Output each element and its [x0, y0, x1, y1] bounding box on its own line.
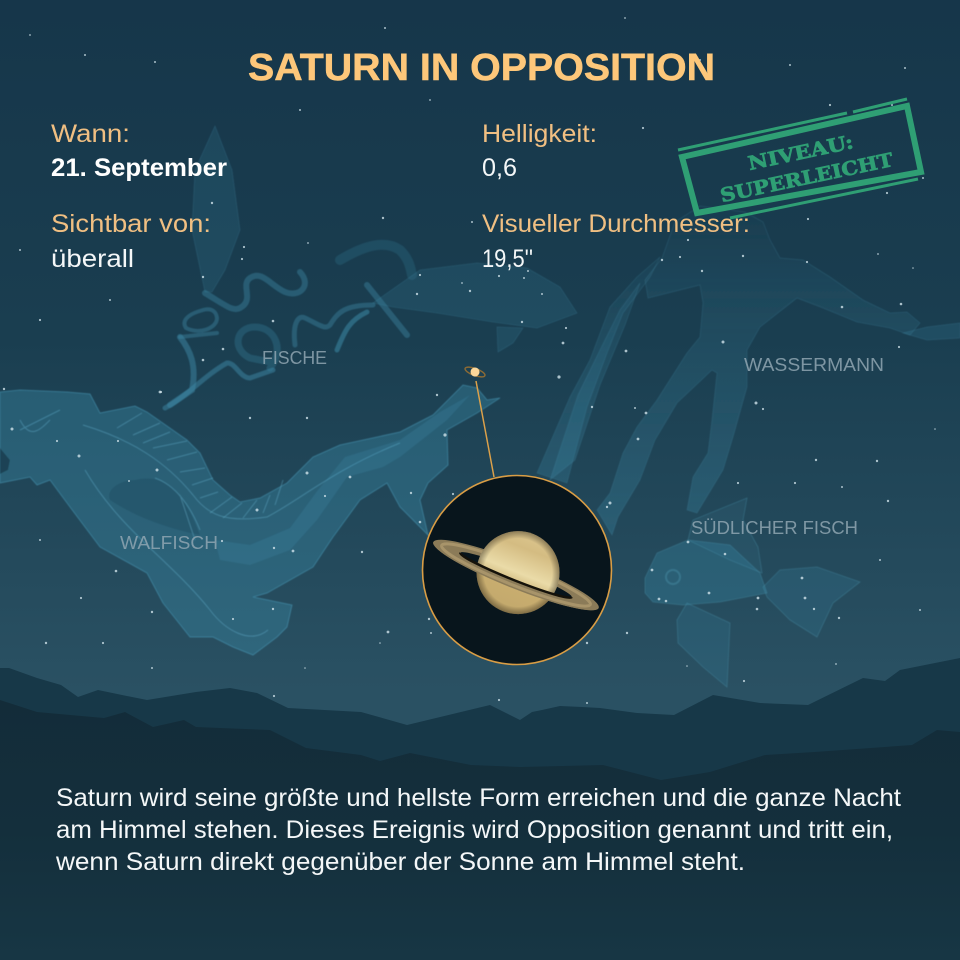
stamp: difficulty level: NIVEAU: — [746, 131, 855, 175]
info block: date: 21. September — [51, 154, 227, 182]
info block: brightness — [482, 120, 597, 182]
stars — [3, 17, 936, 704]
mountains: back ridge — [0, 658, 960, 800]
whale mouth gap — [0, 448, 10, 474]
description paragraph: wenn Saturn direkt gegenüber der Sonne am Himmel steht. — [55, 848, 745, 876]
icon: small Saturn marker — [464, 364, 486, 380]
info block: brightness: 0,6 — [482, 154, 517, 182]
mountains: front ridge — [0, 700, 960, 960]
constellation: Wassermann — [537, 206, 960, 535]
constellation: Walfisch — [0, 385, 500, 655]
stamp: difficulty level — [678, 99, 921, 218]
description paragraph: am Himmel stehen. Dieses Ereignis wird Opposition genannt und tritt ein, — [56, 816, 893, 844]
constellation label: Fische: FISCHE — [262, 348, 327, 368]
constellation label: Walfisch: WALFISCH — [120, 533, 218, 553]
stamp: difficulty level: SUPERLEICHT — [718, 149, 895, 207]
title: SATURN IN OPPOSITION — [248, 47, 715, 89]
constellation: Suedlicher Fisch — [645, 498, 860, 687]
constellation: Fische — [165, 126, 577, 408]
info block: visual diameter: 19,5'' — [482, 245, 533, 273]
info block: brightness: Helligkeit: — [482, 120, 597, 148]
info block: visibility: Sichtbar von: — [51, 210, 211, 238]
info block: date: Wann: — [51, 120, 130, 148]
description paragraph — [55, 784, 901, 876]
description paragraph: Saturn wird seine größte und hellste Form erreichen und die ganze Nacht — [56, 784, 901, 812]
constellation label: Wassermann: WASSERMANN — [744, 355, 884, 375]
info block: visual diameter — [482, 210, 750, 273]
pointer line — [476, 381, 494, 477]
info block: visual diameter: Visueller Durchmesser: — [482, 210, 750, 238]
info block: date — [51, 120, 227, 182]
info block: visibility: überall — [51, 245, 134, 273]
info block: visibility — [51, 210, 211, 273]
constellation label: Suedlicher Fisch: SÜDLICHER FISCH — [691, 518, 858, 538]
callout: Saturn close-up circle — [419, 476, 615, 664]
